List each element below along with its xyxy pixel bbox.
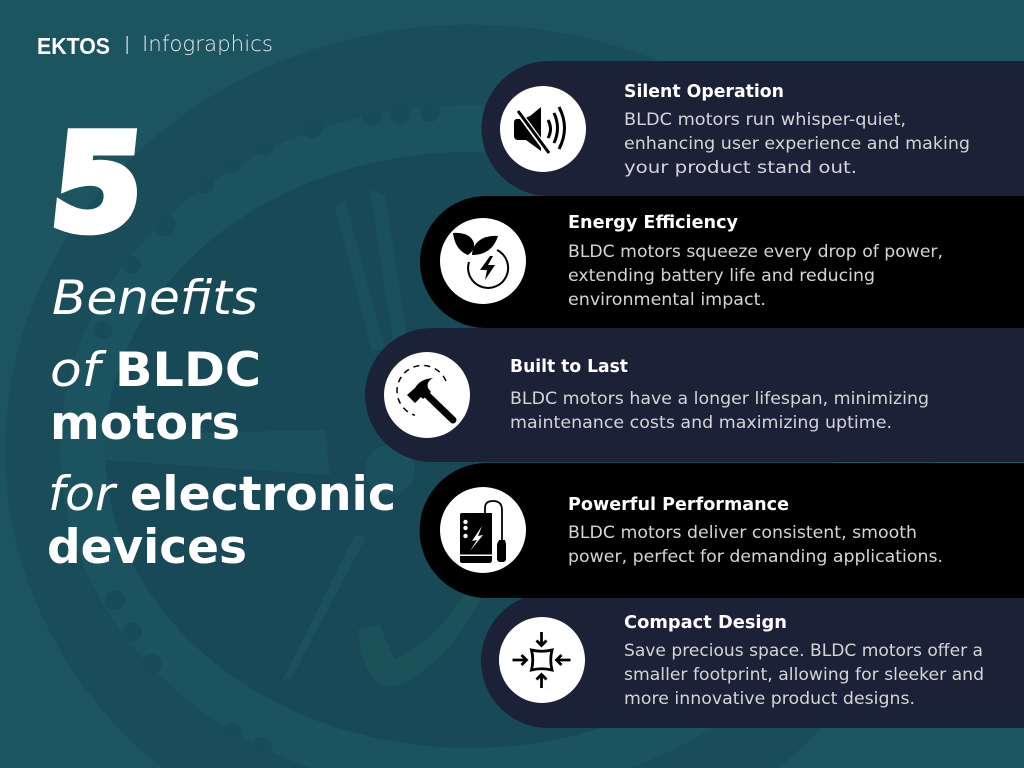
text: built to last: maintenance costs and maximizing uptime. <box>510 413 892 432</box>
icon: hammer <box>397 365 453 420</box>
headline <box>45 107 396 575</box>
of BLDC <box>50 343 261 398</box>
text: powerful performance: BLDC motors deliver consistent, smooth <box>568 523 917 542</box>
text: compact design <box>624 613 984 708</box>
text: energy efficiency: extending battery life and reducing <box>568 266 875 285</box>
logo <box>37 32 273 59</box>
Benefits: Benefits <box>52 271 258 326</box>
panel: silent operation <box>482 61 1024 196</box>
panel: energy efficiency <box>420 196 1024 328</box>
text: compact design: more innovative product designs. <box>624 689 915 708</box>
text: built to last <box>510 357 929 432</box>
icon: muted speaker <box>514 107 564 155</box>
text: silent operation: your product stand out. <box>624 158 857 177</box>
text: compact design: smaller footprint, allowing for sleeker and <box>624 665 984 684</box>
text: energy efficiency: BLDC motors squeeze every drop of power, <box>568 242 943 261</box>
text: silent operation: BLDC motors run whisper-quiet, <box>624 110 906 129</box>
text: energy efficiency: Energy Efficiency <box>568 213 739 233</box>
icon: power bank <box>460 501 506 563</box>
big number 5: 5 <box>45 107 151 261</box>
text: energy efficiency <box>568 213 943 309</box>
devices: devices <box>47 520 247 575</box>
for electronic: electronic <box>130 467 396 522</box>
text: compact design: Compact Design <box>624 613 787 633</box>
text: compact design: Save precious space. BLDC motors offer a <box>624 641 983 660</box>
panel: built to last <box>365 328 1024 462</box>
logo: Infographics <box>142 32 273 56</box>
text: energy efficiency: environmental impact. <box>568 290 766 309</box>
of BLDC: of <box>50 343 107 398</box>
motors: motors <box>50 396 240 451</box>
text: powerful performance: power, perfect for demanding applications. <box>568 547 943 566</box>
text: powerful performance: Powerful Performance <box>568 495 789 515</box>
text: built to last: BLDC motors have a longer lifespan, minimizing <box>510 389 929 408</box>
text: built to last: Built to Last <box>510 357 628 377</box>
text: silent operation: enhancing user experience and making <box>624 134 970 153</box>
text: silent operation: Silent Operation <box>624 82 784 102</box>
panel: compact design <box>481 593 1024 728</box>
text: silent operation <box>624 82 970 177</box>
icon: compress arrows <box>512 632 570 688</box>
logo: EKTOS <box>37 33 110 59</box>
panel: powerful performance <box>420 463 1024 598</box>
text: powerful performance <box>568 495 943 566</box>
for electronic: for <box>48 467 118 522</box>
icon: leaves and bolt <box>453 233 508 288</box>
of BLDC: BLDC <box>115 343 261 398</box>
